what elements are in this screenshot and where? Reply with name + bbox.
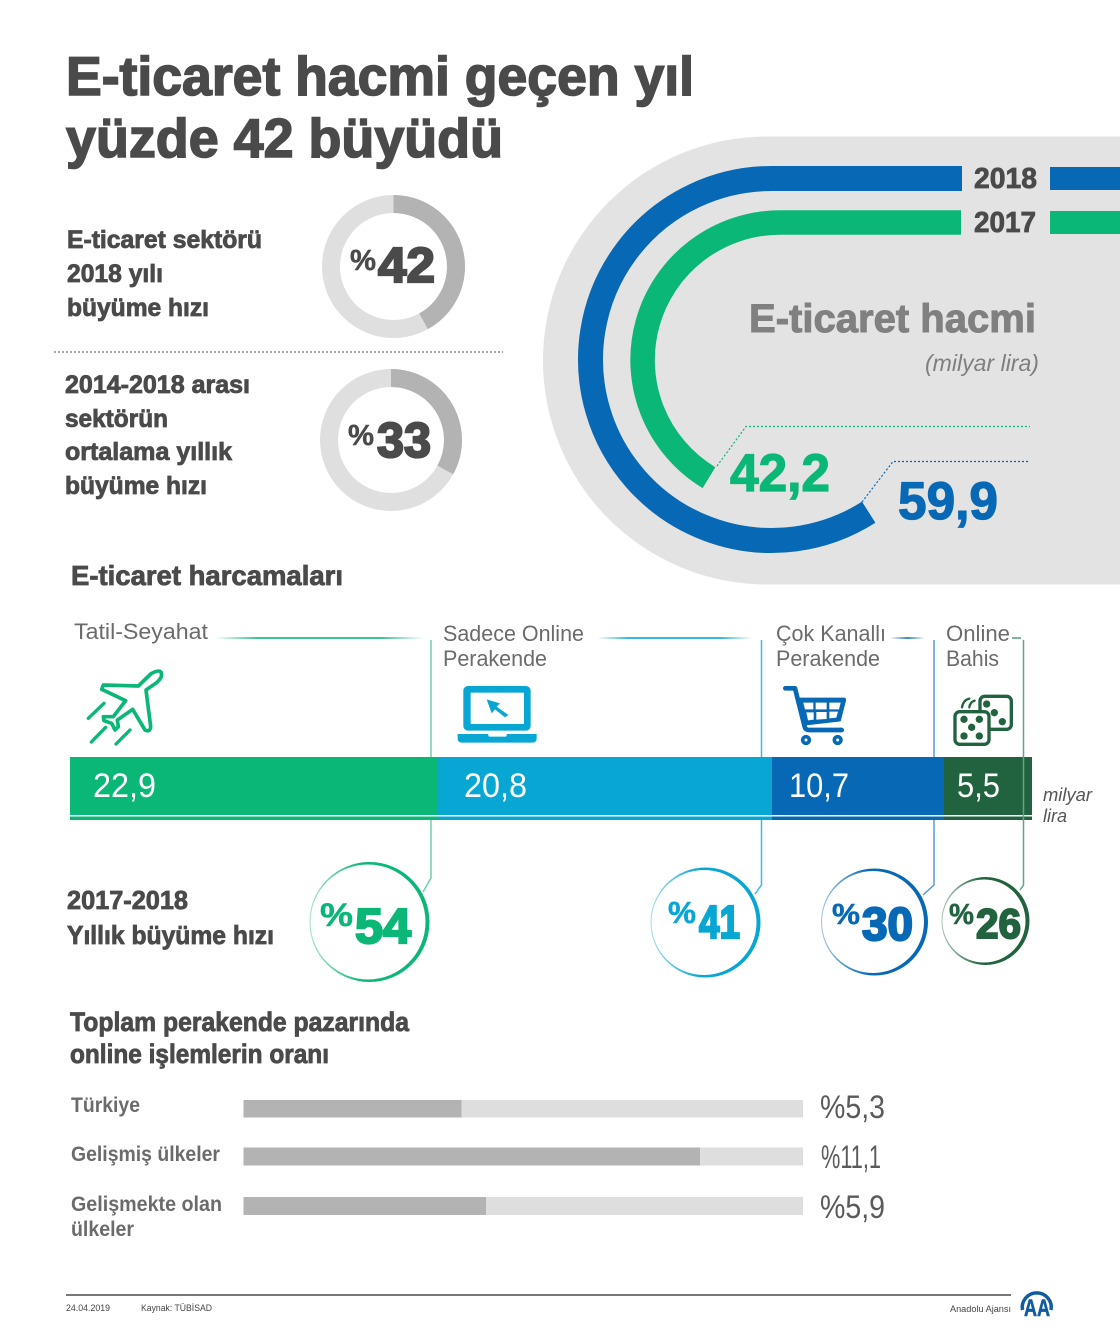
- badge: %54: [310, 862, 430, 982]
- segment: online betting: [944, 757, 1032, 820]
- badge: %26: 26: [976, 900, 1021, 947]
- footer: 24.04.2019: [66, 1303, 110, 1313]
- heading: online share: Toplam perakende pazarında: [70, 1007, 410, 1037]
- 2017 arc: [643, 211, 1120, 478]
- heading: spending: E-ticaret harcamaları: [71, 560, 343, 591]
- text: 2018 growth label: E-ticaret sektörü: [67, 226, 262, 254]
- row: Türkiye: %5,3: [820, 1089, 885, 1125]
- segment: multichannel retail: 10,7: [789, 767, 849, 805]
- icon: dice: [955, 696, 1011, 744]
- donut: %33: 33: [377, 414, 431, 468]
- donut: %42: 42: [378, 239, 435, 293]
- text: average growth label: 2014-2018 arası: [65, 371, 250, 399]
- category: travel label: Tatil-Seyahat: [74, 619, 208, 644]
- row: developing countries: Gelişmekte olan: [71, 1193, 222, 1216]
- footer: [66, 1293, 1051, 1322]
- text: 2018 growth label: büyüme hızı: [67, 294, 209, 322]
- panel background: [543, 136, 1120, 584]
- badge: %26: %: [949, 899, 974, 931]
- segment: online betting: 5,5: [957, 767, 1000, 805]
- row: developed countries: Gelişmiş ülkeler: [71, 1143, 220, 1166]
- category: betting label: Online: [946, 621, 1010, 646]
- footer: Anadolu Ajansı: [950, 1304, 1011, 1314]
- badge: %41: %: [668, 895, 696, 930]
- donut: %42: %: [350, 245, 376, 277]
- category: betting label: Bahis: [946, 646, 999, 671]
- segment: online retail: [437, 757, 772, 820]
- text: average growth label: ortalama yıllık: [65, 438, 232, 466]
- segment: travel: [70, 757, 437, 820]
- row: Türkiye: [71, 1089, 885, 1125]
- panel unit: (milyar lira): [925, 350, 1039, 376]
- growth label: Yıllık büyüme hızı: [67, 920, 274, 950]
- panel heading: E-ticaret hacmi: [749, 297, 1036, 341]
- title: E-ticaret hacmi geçen yıl: [66, 45, 694, 107]
- connectors: [215, 637, 1024, 895]
- stacked bar: [70, 757, 1032, 820]
- title: yüzde 42 büyüdü: [66, 107, 503, 169]
- text: average growth label: sektörün: [65, 405, 168, 433]
- label 2018: 2018: [974, 163, 1037, 195]
- unit: billion lira: milyar: [1043, 785, 1093, 805]
- segment: online retail: 20,8: [464, 767, 527, 805]
- category: multichannel retail label: Çok Kanallı: [776, 621, 886, 646]
- badge: %30: 30: [862, 898, 913, 950]
- growth label: 2017-2018: [67, 885, 188, 915]
- unit: billion lira: lira: [1043, 806, 1067, 826]
- text: average growth label: büyüme hızı: [65, 472, 207, 500]
- badge: %41: 41: [699, 896, 740, 948]
- title: [66, 45, 694, 169]
- icon: plane: [88, 671, 162, 744]
- value 2018: 59,9: [898, 472, 998, 531]
- segment: travel: 22,9: [93, 767, 156, 805]
- row: developing countries: ülkeler: [71, 1218, 134, 1241]
- label 2017: 2017: [974, 207, 1036, 239]
- badge: %30: [821, 868, 928, 976]
- footer: Kaynak: TÜBİSAD: [141, 1303, 212, 1313]
- row: developed countries: %11,1: [821, 1139, 881, 1175]
- panel: e-commerce volume: [543, 136, 1120, 584]
- category: online retail label: Sadece Online: [443, 621, 584, 646]
- leader 2017: [717, 426, 1030, 466]
- text: 2018 growth label: 2018 yılı: [67, 260, 163, 288]
- text: 2018 growth label: [67, 226, 262, 322]
- category: multichannel retail label: Perakende: [776, 646, 880, 671]
- category: online retail label: Perakende: [443, 646, 547, 671]
- category: multichannel retail label: [776, 621, 886, 671]
- badge: %26: [942, 877, 1030, 965]
- 2018 arc: [591, 167, 1120, 540]
- icon: cart: [785, 688, 846, 743]
- badge: %30: %: [832, 899, 860, 931]
- row: developed countries: [71, 1139, 881, 1175]
- category: online retail label: [443, 621, 584, 671]
- divider: [54, 351, 503, 353]
- badge: %41: [650, 868, 760, 978]
- donut: %42: [331, 204, 456, 329]
- text: average growth label: [65, 371, 250, 500]
- badge: %54: 54: [355, 900, 411, 954]
- logo: Anadolu Agency: AA: [1024, 1295, 1050, 1322]
- heading: online share: [70, 1007, 410, 1069]
- growth label: [67, 885, 274, 950]
- value 2017: 42,2: [730, 444, 830, 503]
- badge: %54: %: [320, 897, 353, 933]
- donut: %33: %: [348, 420, 374, 452]
- row: developing countries: %5,9: [820, 1189, 885, 1225]
- heading: online share: online işlemlerin oranı: [70, 1039, 329, 1069]
- category: betting label: [946, 621, 1010, 671]
- row: developing countries: [71, 1189, 885, 1241]
- icon: laptop: [458, 686, 537, 743]
- leader 2018: [862, 462, 1030, 502]
- unit: billion lira: [1043, 785, 1093, 826]
- row: Türkiye: Türkiye: [71, 1094, 140, 1117]
- donut: %33: [329, 378, 453, 502]
- segment: multichannel retail: [772, 757, 944, 820]
